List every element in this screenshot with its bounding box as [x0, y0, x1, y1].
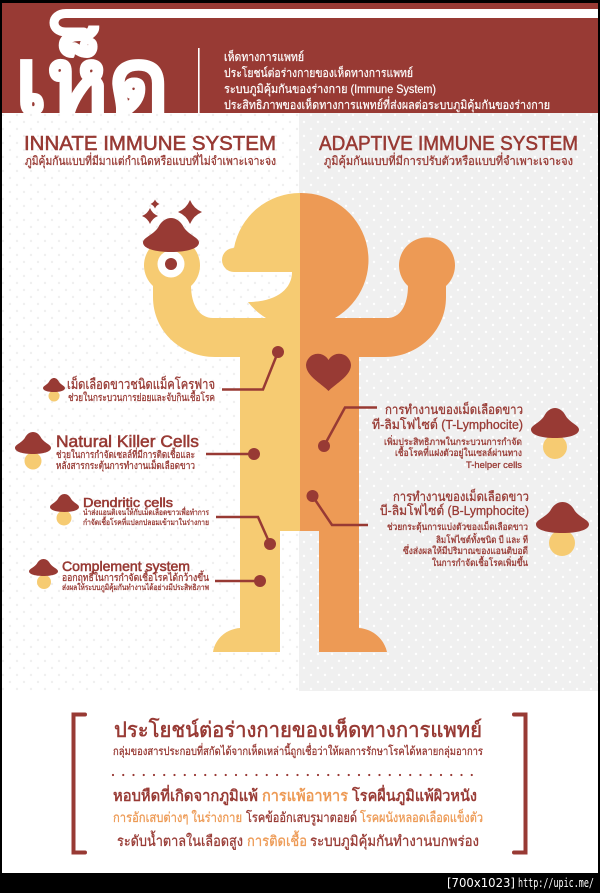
callout text: กำจัดเชื้อโรคที่แปลกปลอมเข้ามาในร่างกาย	[83, 516, 209, 527]
callout text: Dendritic cells	[83, 495, 174, 510]
callout text	[372, 400, 523, 471]
callout: T-lymphocyte	[318, 400, 579, 471]
callout text	[56, 433, 199, 472]
icon: mushroom	[15, 432, 51, 470]
callout text: ลิมโฟไซต์ทั้งชนิด บี และ ที	[436, 533, 528, 546]
figure right half	[300, 193, 455, 652]
benefits line 3: การติดเชื้อ	[247, 830, 307, 850]
header topic list: ประโยชน์ต่อร่างกายของเห็ดทางการแพทย์	[224, 65, 413, 80]
connector	[318, 408, 377, 452]
callout text: นำส่งแอนติเจนให้กับเม็ดเลือดขาวเพื่อทำการ	[83, 506, 210, 517]
callout: dendritic cells	[50, 494, 276, 550]
icon: sparkles	[142, 200, 202, 224]
icon: mushroom	[531, 408, 579, 459]
callout: complement system	[29, 558, 266, 593]
benefits line 3: ระบบภูมิคุ้มกันทำงานบกพร่อง	[310, 833, 479, 850]
callout text: การทำงานของเม็ดเลือดขาว	[393, 487, 529, 504]
benefits line 2: การอักเสบต่างๆ ในร่างกาย	[113, 809, 242, 825]
left bracket	[74, 714, 85, 852]
benefits line 1: หอบหืดที่เกิดจากภูมิแพ้	[113, 785, 258, 806]
watermark footer	[447, 876, 594, 890]
callout text	[380, 487, 529, 569]
icon: mushroom on hand	[143, 218, 199, 252]
benefits line 1: โรคผื่นภูมิแพ้ผิวหนัง	[352, 785, 477, 806]
panel: medical benefits	[74, 714, 526, 852]
connector	[206, 448, 260, 460]
callout text: เพิ่มประสิทธิภาพในกระบวนการกำจัด	[384, 435, 522, 448]
panel: innate background	[2, 113, 299, 691]
callout text: ส่งผลให้ระบบภูมิคุ้มกันทำงานได้อย่างมีประสิทธิภาพ	[62, 583, 209, 593]
heading: innate immune system	[24, 133, 276, 169]
icon: mushroom	[50, 494, 79, 526]
icon: mushroom	[29, 559, 58, 589]
figure: body	[142, 193, 455, 652]
benefits subheading: กลุ่มของสารประกอบที่สกัดได้จากเห็ดเหล่านี้ถูกเชื่อว่าให้ผลการรักษาโรคได้หลายกลุ่มอาการ	[113, 743, 483, 758]
dotted divider	[113, 774, 482, 776]
icon: mushroom	[43, 378, 65, 402]
benefits line 3: ระดับน้ำตาลในเลือดสูง	[117, 830, 243, 850]
header topic list	[224, 49, 550, 113]
header band	[2, 3, 598, 113]
connector	[306, 490, 368, 525]
connector	[222, 346, 284, 390]
benefits line 2	[113, 808, 483, 826]
callout text: ในการกำจัดเชื้อโรคเพิ่มขึ้น	[432, 556, 528, 569]
callout text: Natural Killer Cells	[56, 433, 199, 451]
callout text: บี-ลิมโฟไซต์ (B-Lymphocite)	[380, 503, 529, 518]
icon: mushroom	[536, 502, 589, 556]
callout text: ซึ่งส่งผลให้มีปริมาณของแอนติบอดี	[403, 544, 528, 557]
watermark footer: [700x1023]	[447, 876, 515, 890]
callout: macrophage	[43, 346, 284, 404]
benefits line 1: การแพ้อาหาร	[262, 788, 348, 805]
heading: innate immune system: INNATE IMMUNE SYSTEM	[24, 133, 276, 155]
figure left half	[144, 193, 300, 652]
header topic list: ระบบภูมิคุ้มกันของร่างกาย (Immune System)	[224, 82, 436, 97]
callout text: ช่วยในการกำจัดเซลล์ที่มีการติดเชื้อและ	[56, 447, 195, 461]
header topic list: ประสิทธิภาพของเห็ดทางการแพทย์ที่ส่งผลต่อระบบภูมิคุ้มกันของร่างกาย	[224, 96, 550, 113]
benefits line 3	[117, 830, 479, 850]
heading: adaptive immune system	[319, 133, 578, 169]
benefits line 2: โรคข้ออักเสบรูมาตอยด์	[246, 809, 357, 826]
callout: B-lymphocyte	[306, 487, 589, 569]
callout text: เม็ดเลือดขาวชนิดแม็คโครฟาจ	[67, 375, 215, 392]
benefits line 2: โรคผนังหลอดเลือดแข็งตัว	[360, 808, 483, 825]
callout text	[67, 375, 215, 404]
callout text: หลั่งสารกระตุ้นการทำงานเม็ดเลือดขาว	[56, 458, 195, 472]
benefits line 1	[113, 785, 477, 806]
connector	[216, 517, 276, 550]
callout: natural killer cells	[15, 432, 260, 472]
connector	[215, 575, 266, 587]
icon: heart	[306, 354, 351, 391]
heading: innate immune system: ภูมิคุ้มกันแบบที่มีมาแต่กำเนิดหรือแบบที่ไม่จำเพาะเจาะจง	[25, 152, 276, 169]
title: เห็ด	[15, 26, 169, 133]
header topic list: เห็ดทางการแพทย์	[224, 49, 304, 64]
callout text: ออกฤทธิ์ในการกำจัดเชื้อโรคได้กว้างขึ้น	[62, 570, 209, 584]
callout text: เชื้อโรคที่แฝงตัวอยู่ในเซลล์ผ่านทาง	[395, 446, 522, 459]
benefits heading: ประโยชน์ต่อร่างกายของเห็ดทางการแพทย์	[114, 716, 482, 742]
title	[20, 9, 598, 113]
heading: adaptive immune system: ADAPTIVE IMMUNE SYSTEM	[319, 133, 578, 155]
callout text: T-helper cells	[466, 460, 522, 471]
callout text: การทำงานของเม็ดเลือดขาว	[385, 400, 523, 417]
callout text: ที-ลิมโฟไซต์ (T-Lymphocite)	[372, 417, 523, 432]
callout text	[83, 495, 210, 527]
callout text	[62, 558, 209, 593]
callout text: ช่วยในกระบวนการย่อยและจับกินเชื้อโรค	[68, 390, 215, 404]
heading: adaptive immune system: ภูมิคุ้มกันแบบที่มีการปรับตัวหรือแบบที่จำเพาะเจาะจง	[324, 152, 573, 169]
callout text: Complement system	[62, 558, 190, 574]
right bracket	[514, 714, 526, 852]
icon: eye	[158, 250, 184, 278]
panel: adaptive background	[299, 113, 598, 691]
callout text: ช่วยกระตุ้นการแบ่งตัวของเม็ดเลือดขาว	[387, 520, 528, 533]
